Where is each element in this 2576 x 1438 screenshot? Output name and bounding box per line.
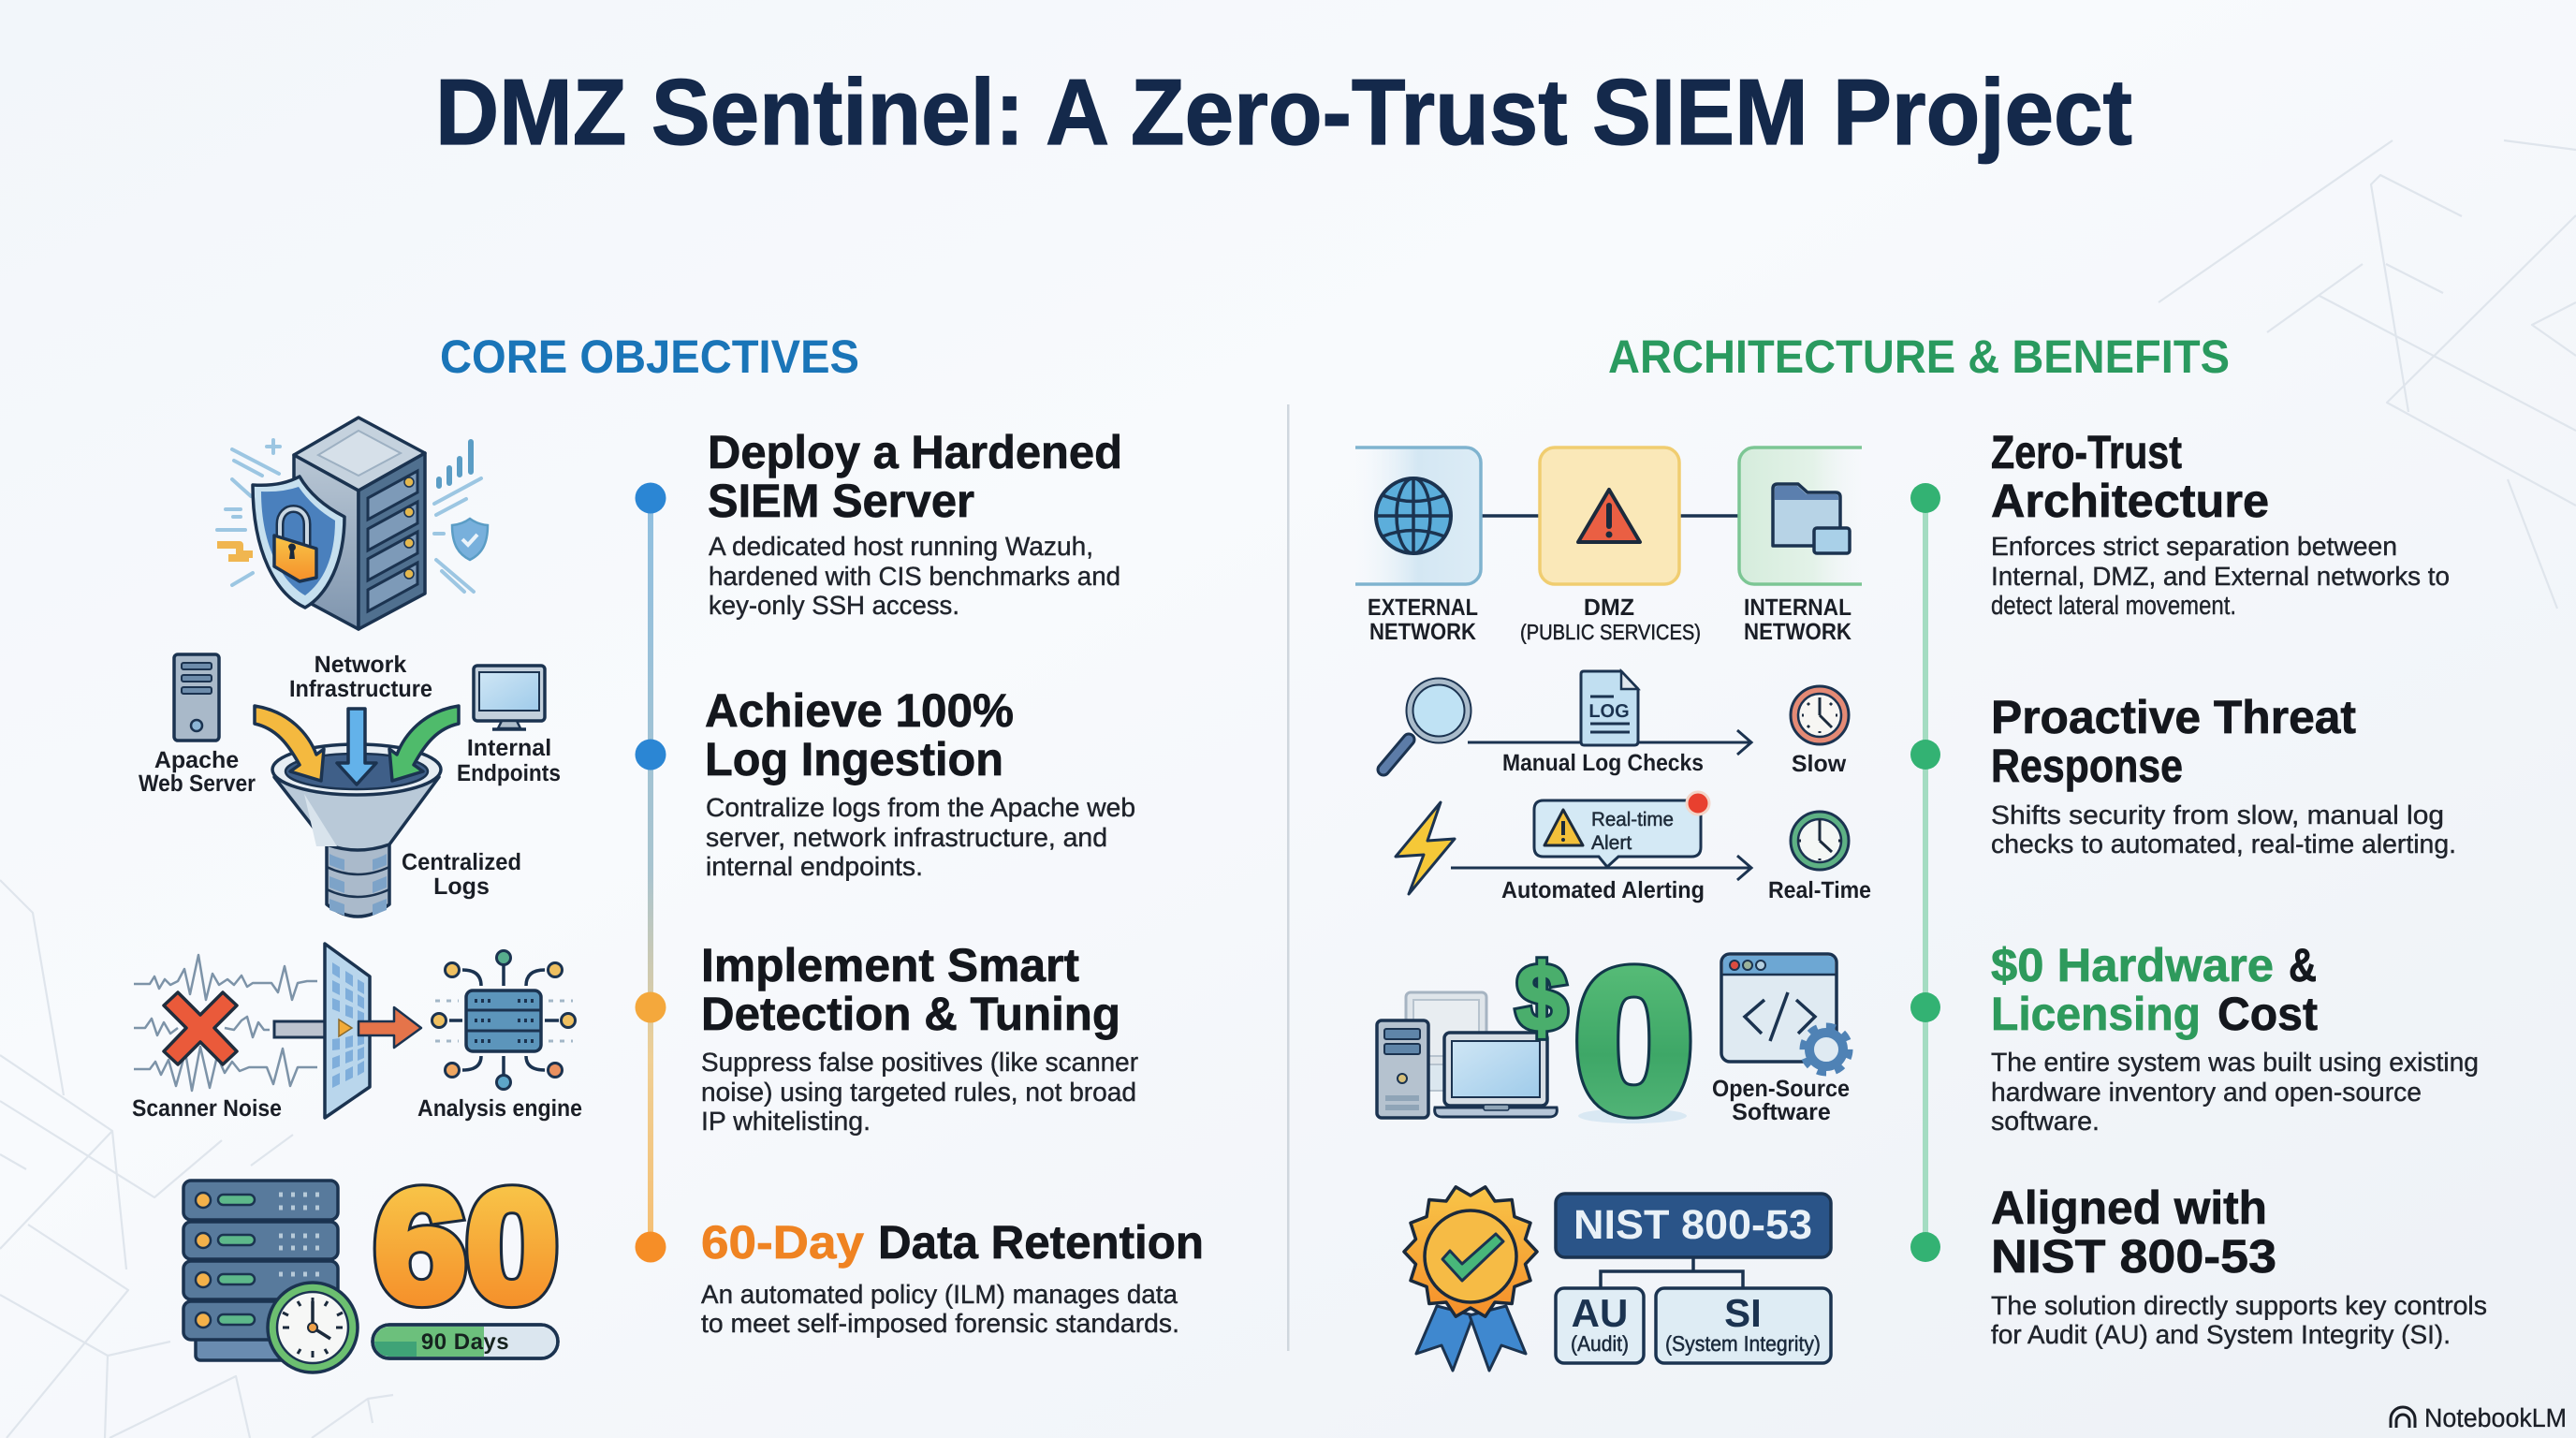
label: open-source software: Software: [1732, 1099, 1831, 1125]
zone: external: [1355, 448, 1481, 584]
objective 1 text: A dedicated host running Wazuh,: [709, 532, 1093, 561]
funnel labels: Infrastructure: [289, 676, 432, 702]
objective 3 text: [701, 939, 1138, 1136]
panel: architecture and benefits: [1355, 330, 2487, 1371]
clock: [268, 1283, 358, 1372]
nist header box: NIST 800-53: [1573, 1202, 1812, 1248]
zone labels: NETWORK: [1744, 619, 1852, 645]
objective 4 text: [701, 1216, 1204, 1338]
benefit 3 text: Cost: [2217, 988, 2318, 1040]
label: real-time: Real-Time: [1768, 877, 1871, 903]
benefit 4 text: The solution directly supports key controls: [1991, 1291, 2487, 1320]
icon: hardened server with shield: [217, 418, 488, 629]
benefit 2 text: Proactive Threat: [1991, 691, 2356, 743]
icon: real-time clock: [1791, 812, 1849, 870]
benefit 4 text: NIST 800-53: [1991, 1230, 2276, 1283]
big zero: 0: [1574, 928, 1693, 1153]
benefit 3 text: The entire system was built using existing: [1991, 1048, 2479, 1077]
arrow: filtered output: [359, 1007, 421, 1048]
nist header box: [1556, 1194, 1831, 1257]
icon: open-source window: [1721, 954, 1849, 1072]
label: open-source software: Open-Source: [1712, 1076, 1850, 1102]
icon: storage rack with clock: [183, 1181, 358, 1372]
objective 3 text: IP whitelisting.: [701, 1107, 871, 1136]
icon: noise filter: [132, 944, 582, 1122]
benefit 1 text: Architecture: [1991, 475, 2269, 527]
objective 2 text: Contralize logs from the Apache web: [706, 793, 1135, 822]
icon: slow clock: [1791, 686, 1849, 744]
source: apache tower: [174, 654, 219, 741]
benefit 3 text: Licensing: [1991, 988, 2201, 1040]
icon: magnifier: [1383, 682, 1468, 770]
analysis engine: [432, 951, 575, 1090]
control: system integrity: SI: [1724, 1291, 1762, 1335]
benefit 3 text: software.: [1991, 1107, 2100, 1136]
alert bubble: [1534, 792, 1709, 867]
big number 60 fill: 60: [374, 1158, 558, 1334]
icon: log document: LOG: [1588, 701, 1630, 722]
benefit 1 text: Zero-Trust: [1991, 426, 2182, 478]
arrow: real-time path: [1451, 856, 1751, 880]
big zero outline: 0: [1574, 928, 1693, 1153]
big dollar sign: $: [1516, 946, 1567, 1050]
objective 3 text: noise) using targeted rules, not broad: [701, 1078, 1136, 1107]
arrow: yellow input: [255, 706, 324, 781]
control: system integrity: [1656, 1288, 1831, 1363]
objective 3 text: Implement Smart: [701, 939, 1079, 991]
benefit 4 text: [1991, 1181, 2487, 1349]
objective 2 text: Achieve 100%: [705, 684, 1014, 737]
timeline: benefits: [1910, 483, 1940, 1262]
benefit 2 text: [1991, 691, 2456, 858]
diagram: manual log checks: [1383, 671, 1849, 777]
objective 4 text: An automated policy (ILM) manages data: [701, 1280, 1178, 1309]
zone labels: INTERNAL: [1744, 594, 1852, 621]
diagram: zero cost: [1377, 928, 1850, 1153]
benefit 2 text: Response: [1991, 740, 2183, 792]
zone: dmz: [1540, 448, 1679, 584]
timeline: objectives: [635, 483, 666, 1262]
funnel labels: Logs: [433, 873, 490, 900]
funnel labels: Network: [315, 652, 406, 678]
benefit 4 text: Aligned with: [1991, 1181, 2267, 1234]
objective 4 text: 60-Day: [701, 1216, 864, 1269]
funnel labels: [139, 652, 561, 900]
funnel labels: Web Server: [139, 770, 256, 797]
benefit 3 text: hardware inventory and open-source: [1991, 1078, 2422, 1107]
benefit 2 text: Shifts security from slow, manual log: [1991, 800, 2444, 829]
objective 2 text: internal endpoints.: [706, 852, 923, 881]
objective 1 text: hardened with CIS benchmarks and: [709, 562, 1120, 591]
filter labels: Analysis engine: [417, 1095, 582, 1122]
filter panel: [325, 944, 370, 1118]
benefit 3 text: [1991, 939, 2479, 1136]
red x: [164, 992, 237, 1064]
funnel labels: Internal: [467, 735, 551, 761]
heading: architecture and benefits: ARCHITECTURE & BENEFITS: [1608, 330, 2230, 383]
objective 1 text: Deploy a Hardened: [708, 426, 1122, 478]
scanner noise waves: [134, 955, 317, 1091]
icon: existing hardware: [1377, 992, 1557, 1118]
label: manual log checks: Manual Log Checks: [1502, 750, 1704, 776]
benefit 1 text: [1991, 426, 2450, 620]
diagram: nist compliance: [1404, 1187, 1831, 1371]
arrow: slow path: [1468, 730, 1751, 755]
icon: award badge: [1404, 1187, 1537, 1371]
objective 3 text: Suppress false positives (like scanner: [701, 1048, 1138, 1077]
zone labels: (PUBLIC SERVICES): [1520, 620, 1701, 644]
icon: log document: [1581, 671, 1638, 745]
title: DMZ Sentinel: A Zero-Trust SIEM Project: [435, 60, 2132, 165]
benefit 1 text: Enforces strict separation between: [1991, 532, 2397, 561]
zone labels: NETWORK: [1369, 619, 1476, 645]
zero shadow: [1578, 1108, 1687, 1123]
icon: log funnel: [139, 652, 561, 917]
filter labels: [132, 1095, 582, 1122]
benefit 3 text: &: [2289, 939, 2317, 991]
benefit 3 text: $0 Hardware: [1991, 939, 2274, 991]
big number 60: 60: [374, 1158, 558, 1334]
label: slow: Slow: [1792, 751, 1847, 777]
alert bubble: Alert: [1591, 832, 1632, 854]
arrow: blue input: [337, 709, 376, 785]
label: automated alerting: Automated Alerting: [1501, 877, 1705, 903]
big dollar outline: $: [1516, 946, 1567, 1050]
objective 4 text: Data Retention: [878, 1216, 1204, 1269]
source: endpoint monitor: [474, 666, 545, 729]
zone labels: [1368, 594, 1852, 645]
benefit 4 text: for Audit (AU) and System Integrity (SI).: [1991, 1320, 2451, 1349]
funnel body: [272, 744, 441, 917]
control: audit: [1556, 1288, 1644, 1363]
objective 2 text: server, network infrastructure, and: [706, 823, 1107, 852]
objective 3 text: Detection & Tuning: [701, 988, 1120, 1040]
panel: core objectives: [132, 330, 1204, 1372]
benefit 2 text: checks to automated, real-time alerting.: [1991, 829, 2456, 858]
filter bar: [274, 1021, 329, 1037]
progress pill: 90 days: 90 Days: [421, 1329, 509, 1355]
funnel labels: Endpoints: [457, 760, 561, 786]
progress pill: 90 days: [373, 1325, 558, 1358]
benefit 1 text: Internal, DMZ, and External networks to: [1991, 562, 2450, 591]
arrow: green input: [389, 706, 459, 781]
control: audit: AU: [1572, 1291, 1628, 1335]
objective 1 text: [708, 426, 1122, 620]
objective 1 text: SIEM Server: [708, 475, 974, 527]
label: open-source software: [1712, 1076, 1850, 1125]
objective 2 text: Log Ingestion: [705, 733, 1003, 785]
column divider: [1287, 404, 1290, 1351]
control: system integrity: (System Integrity): [1665, 1331, 1821, 1356]
funnel labels: Centralized: [402, 849, 521, 875]
alert bubble: Real-time: [1591, 809, 1674, 830]
zone: internal: [1739, 448, 1862, 584]
zone labels: EXTERNAL: [1368, 594, 1478, 621]
funnel labels: Apache: [154, 747, 239, 773]
objective 4 text: to meet self-imposed forensic standards.: [701, 1309, 1179, 1338]
zone labels: DMZ: [1584, 594, 1634, 621]
icon: lightning bolt: [1396, 802, 1455, 894]
objective 2 text: [705, 684, 1135, 881]
benefit 1 text: detect lateral movement.: [1991, 591, 2236, 620]
control: audit: (Audit): [1571, 1331, 1629, 1356]
filter labels: Scanner Noise: [132, 1095, 282, 1122]
brand: notebooklm: NotebookLM: [2424, 1403, 2567, 1432]
diagram: network zones: [1355, 448, 1862, 645]
heading: core objectives: CORE OBJECTIVES: [440, 330, 859, 383]
diagram: automated alerting: [1396, 792, 1871, 903]
objective 1 text: key-only SSH access.: [709, 591, 959, 620]
